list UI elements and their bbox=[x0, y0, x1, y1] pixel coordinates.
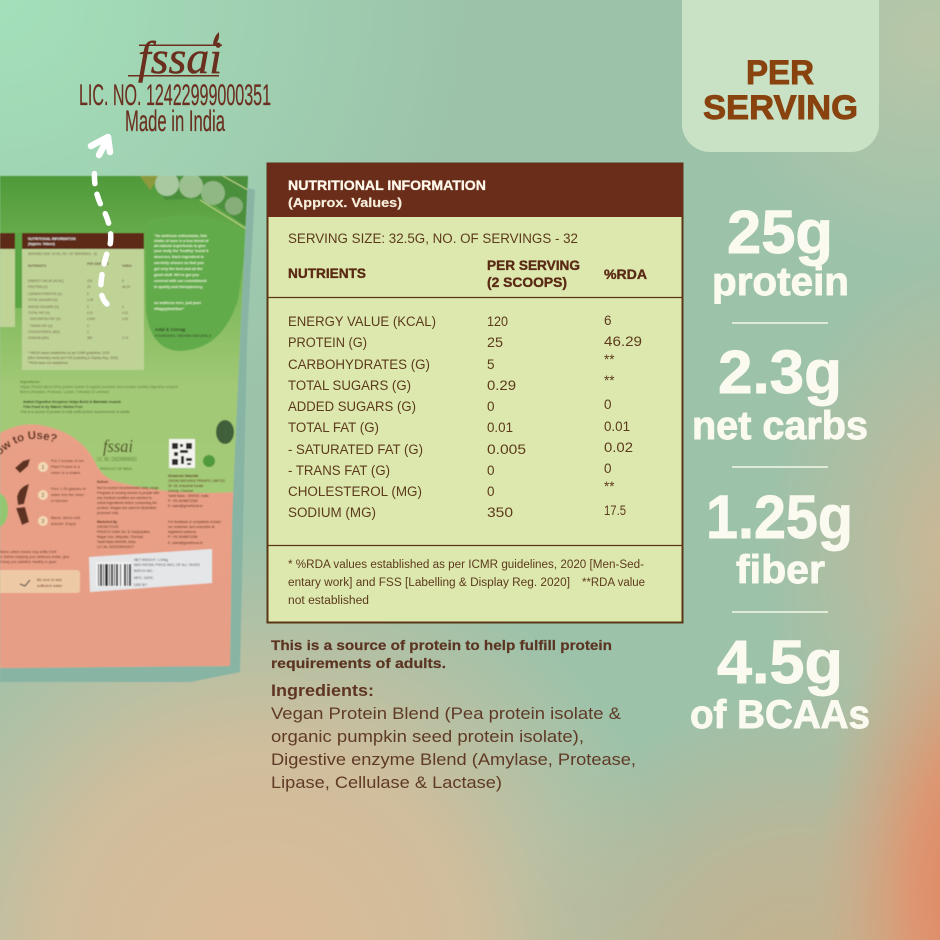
pouch nutrition table: [Men-Sedentary work] and FSS [Labelling & Display Reg. 2020] bbox=[28, 356, 118, 360]
pouch founders note: carefully chosen so that you bbox=[154, 261, 205, 265]
nutrient names: ADDED SUGARS (G) bbox=[288, 399, 416, 414]
table header bbox=[267, 163, 683, 217]
stat: protein: protein bbox=[712, 260, 849, 304]
pouch founders note: get only the best and all the bbox=[154, 267, 203, 271]
rda values: 0 bbox=[604, 461, 612, 476]
fssai licence block: Made in India bbox=[125, 105, 225, 138]
pouch founders note: good stuff. We've got you bbox=[154, 273, 200, 277]
pouch barcode label: USE BY: bbox=[134, 583, 148, 587]
pouch fssai mark: LIC. NO. 12422999000351 bbox=[97, 457, 137, 463]
ingredients: Lipase, Cellulase & Lactase) bbox=[271, 773, 502, 792]
pouch company details: P: +91 8248672289 bbox=[168, 535, 198, 539]
per serving values bbox=[487, 314, 526, 520]
pouch company details: E: sales@growthook.in bbox=[168, 541, 203, 545]
pouch company details: check ingredients before consuming the bbox=[97, 501, 157, 505]
pouch nutrition table: 0 bbox=[87, 324, 89, 328]
pouch founders note: deserves. Each ingredient is bbox=[154, 255, 204, 259]
rda values: 0 bbox=[604, 397, 612, 412]
stat: BCAAs bbox=[690, 628, 870, 737]
pouch how to use: or blender bbox=[51, 499, 69, 503]
pouch founders note: so wellness here, just pure bbox=[154, 301, 201, 305]
pouch company details: Tamil Nadu 600096, India bbox=[97, 540, 136, 544]
pouch fssai mark: PRODUCT OF INDIA bbox=[100, 466, 132, 471]
pouch nutrition table: **RDA value not established bbox=[28, 361, 68, 365]
pouch nutrition table: 0 bbox=[87, 330, 89, 334]
ingredients: organic pumpkin seed protein isolate), bbox=[271, 727, 584, 746]
pouch nutrition table: CARBOHYDRATES (G) bbox=[28, 292, 62, 296]
pouch how to use: d. Before enjoying your delicious shake, give bbox=[0, 555, 69, 559]
rda values: 6 bbox=[604, 313, 612, 328]
product pouch back bbox=[0, 175, 255, 682]
badge heading bbox=[703, 54, 858, 127]
column headings: PER SERVING bbox=[487, 258, 580, 273]
pouch nutrition table: * %RDA values established as per ICMR guidelines, 2020 bbox=[28, 351, 110, 355]
pouch how to use bbox=[0, 430, 86, 594]
rda values: 17.5 bbox=[604, 503, 626, 518]
pouch founders note: your body the 'healthy' boost it bbox=[154, 249, 209, 253]
pouch nutrition table: ADDED SUGARS (G) bbox=[28, 305, 59, 309]
pouch company details: Tamil Nadu - 600032, India bbox=[168, 494, 209, 498]
pouch founders note: covered with our commitment bbox=[154, 279, 207, 283]
pouch company details: Deliver bbox=[97, 480, 109, 484]
per serving values: 120 bbox=[487, 314, 508, 329]
serving size: SERVING SIZE: 32.5G, NO. OF SERVINGS - 32 bbox=[288, 231, 578, 246]
pouch barcode label: MAX RETAIL PRICE INCL OF ALL TAXES bbox=[134, 563, 200, 567]
stat: fiber bbox=[706, 483, 853, 592]
product pouch back: FOUNDERS, GROWN NATURALS bbox=[155, 334, 212, 338]
pouch company details: Guindy, Chennai bbox=[168, 489, 193, 493]
per serving values: 0.29 bbox=[487, 378, 516, 393]
nutrient names: TOTAL SUGARS (G) bbox=[288, 378, 411, 393]
dashed arrow bbox=[91, 137, 111, 304]
ingredients bbox=[271, 681, 636, 792]
pouch nutrition table: 6 bbox=[122, 279, 124, 283]
pouch how to use: blend, which means may settle if left bbox=[0, 550, 56, 554]
footnote bbox=[288, 559, 645, 607]
pouch nutrition table: PROTEIN (G) bbox=[28, 285, 48, 289]
pouch how to use: ll keep you satisfied, healthy or goes bbox=[0, 560, 57, 564]
nutrient names: TOTAL FAT (G) bbox=[288, 420, 379, 435]
nutrient names: - TRANS FAT (G) bbox=[288, 463, 390, 478]
pouch fssai mark bbox=[97, 436, 137, 471]
per serving values: 0.005 bbox=[487, 442, 526, 457]
fssai licence block bbox=[79, 32, 271, 138]
column headings: (2 SCOOPS) bbox=[487, 275, 567, 290]
pouch how to use: mixer or a shaker bbox=[51, 471, 81, 475]
pouch nutrition table: %RDA bbox=[122, 264, 132, 268]
pouch company details: product. Images are used for illustrative bbox=[97, 506, 156, 510]
pouch ingredients: Blend (Amylase, Protease, Lipase, Cellulase & Lactase) bbox=[20, 390, 109, 394]
pouch nutrition table: PER SERVING bbox=[87, 262, 109, 266]
nutrient names: - SATURATED FAT (G) bbox=[288, 442, 423, 457]
pouch how to use: Put 2 scoops of our bbox=[51, 459, 84, 463]
pouch ingredients bbox=[20, 380, 178, 414]
fssai licence block: fssai bbox=[138, 32, 222, 83]
pouch founders note bbox=[154, 234, 209, 311]
pouch barcode label: NET WEIGHT: 1.04kg bbox=[134, 558, 168, 562]
per serving values: 0.01 bbox=[487, 420, 513, 435]
pouch barcode label: MFG. DATE: bbox=[134, 576, 154, 580]
pouch company details: registered address bbox=[168, 530, 196, 534]
pouch nutrition table: 5 bbox=[87, 292, 89, 296]
pouch company details: E: sales@growthook.in bbox=[168, 504, 203, 508]
stat: net carbs: net carbs bbox=[692, 404, 868, 448]
pouch how to use: smooth. Enjoy! bbox=[51, 522, 76, 526]
pouch nutrition table: 46.29 bbox=[122, 285, 130, 289]
pouch fssai mark: fssai bbox=[103, 436, 133, 456]
pouch nutrition table: 17.5 bbox=[122, 336, 128, 340]
pouch nutrition table: 25 bbox=[87, 285, 91, 289]
stat: net carbs bbox=[692, 338, 868, 448]
rda values bbox=[604, 313, 642, 518]
rda values: ** bbox=[604, 479, 615, 494]
pouch company details: GROW FOOD bbox=[97, 525, 119, 529]
stat: BCAAs: 4.5g bbox=[717, 628, 843, 696]
per serving values: 0 bbox=[487, 399, 495, 414]
ingredients: Digestive enzyme Blend (Amylase, Protease, bbox=[271, 750, 636, 769]
nutrient names: CARBOHYDRATES (G) bbox=[288, 357, 430, 372]
pouch nutrition table: - SATURATED FAT (G) bbox=[28, 317, 61, 321]
pouch nutrition table: 0.02 bbox=[122, 317, 128, 321]
badge heading: SERVING bbox=[703, 89, 858, 127]
pouch nutrition table: SODIUM (MG) bbox=[28, 336, 49, 340]
ingredients: Vegan Protein Blend (Pea protein isolate & bbox=[271, 704, 622, 723]
pouch how to use: Pour 1.25 glasses of bbox=[51, 487, 87, 491]
ingredients: Ingredients: bbox=[271, 681, 374, 700]
rda values: ** bbox=[604, 373, 615, 388]
pouch company details: PRESTO GSM, No. 8, Kanjurpatha bbox=[97, 530, 150, 534]
pouch nutrition table: 120 bbox=[87, 279, 93, 283]
pouch company details: Nagar Line, Melpalai, Chennai, bbox=[97, 535, 144, 539]
pouch nutrition table: ENERGY VALUE (KCAL) bbox=[28, 279, 64, 283]
pouch founders note: all-natural superfoods to give bbox=[154, 244, 206, 248]
pouch company details: P: +91 8248672289 bbox=[168, 499, 198, 503]
pouch how to use: 2 bbox=[42, 493, 44, 499]
pouch nutrition table: 0.29 bbox=[87, 298, 93, 302]
pouch nutrition table: (Approx. Values) bbox=[28, 242, 55, 246]
fssai licence block: LIC. NO. 12422999000351 bbox=[79, 79, 271, 112]
pouch nutrition table: 0 bbox=[122, 305, 124, 309]
rda values: 0.02 bbox=[604, 440, 633, 455]
product pouch back: Adal & Corrag bbox=[155, 327, 186, 332]
rda values: 46.29 bbox=[604, 334, 642, 349]
pouch company details: our customer care executive at bbox=[168, 525, 214, 529]
nutrient names: ENERGY VALUE (KCAL) bbox=[288, 314, 436, 329]
stat: fiber: 1.25g bbox=[706, 483, 853, 551]
rda values: ** bbox=[604, 352, 615, 367]
pouch how to use: sufficient water bbox=[37, 584, 63, 588]
pouch company details bbox=[97, 474, 226, 549]
footnote: * %RDA values established as per ICMR guidelines, 2020 [Men-Sed- bbox=[288, 559, 644, 571]
pouch nutrition table: 0.005 bbox=[87, 317, 95, 321]
per serving badge bbox=[682, 0, 879, 152]
pouch ingredients: Vegan Protein Blend (Pea protein isolate & organic pumpkin seed protein isolate) Digestive enzyme bbox=[20, 385, 178, 389]
stat: protein: 25g bbox=[727, 198, 833, 266]
table header: (Approx. Values) bbox=[288, 195, 402, 210]
pouch how to use: 3 bbox=[42, 519, 44, 525]
pouch how to use: Blend, blend until bbox=[51, 516, 80, 520]
pouch nutrition table: - TRANS FAT (G) bbox=[28, 324, 53, 328]
leaf shape bbox=[146, 240, 245, 352]
pouch QR code bbox=[169, 439, 215, 468]
per serving values: 0 bbox=[487, 484, 495, 499]
pouch company details: any medical condition are advised to bbox=[97, 496, 152, 500]
source of protein statement: requirements of adults. bbox=[271, 655, 446, 671]
pouch nutrition table: TOTAL FAT (G) bbox=[28, 311, 50, 315]
pouch company details: SF-18, Industrial Estate bbox=[168, 484, 204, 488]
column headings: NUTRIENTS bbox=[288, 266, 366, 281]
pouch salmon lower area bbox=[0, 424, 240, 670]
pouch ingredients: Ingredients: bbox=[20, 380, 41, 384]
pouch ingredients: This Food is by Nature Gluten Free bbox=[23, 405, 83, 409]
pouch founders note: shake of ours is a true blend of bbox=[154, 239, 209, 243]
pouch nutrition table: NUTRITIONAL INFORMATION bbox=[28, 237, 76, 241]
pouch founders note: to quality and transparency, bbox=[154, 285, 203, 289]
pouch company details: GROW NATURES PRIVATE LIMITED bbox=[168, 479, 226, 483]
nutrient names: CHOLESTEROL (MG) bbox=[288, 484, 422, 499]
pouch nutrition table: 0.01 bbox=[87, 311, 93, 315]
badge heading: PER bbox=[746, 54, 814, 92]
footnote: **RDA value bbox=[582, 577, 645, 589]
source of protein statement bbox=[271, 637, 612, 671]
pouch ingredients: Added Digestive Enzymes Helps Build & Maintain muscle bbox=[23, 400, 121, 404]
nutrient names: PROTEIN (G) bbox=[288, 335, 367, 350]
source of protein statement: This is a source of protein to help fulfill protein bbox=[271, 637, 612, 653]
footnote: entary work] and FSS [Labelling & Display Reg. 2020] bbox=[288, 577, 570, 589]
nutrient names: SODIUM (MG) bbox=[288, 505, 376, 520]
pouch barcode label: BATCH NO.: bbox=[134, 569, 154, 573]
pouch company details: Grownuts Naturals bbox=[168, 474, 198, 478]
pouch nutrition table: 0.01 bbox=[122, 311, 128, 315]
column headings: %RDA bbox=[604, 267, 647, 282]
pouch company details: Not to exceed recommended daily usage. bbox=[97, 486, 160, 490]
stat: fiber: fiber bbox=[736, 548, 825, 592]
pouch how to use: water into the mixer bbox=[51, 493, 85, 497]
per serving values: 5 bbox=[487, 357, 495, 372]
pouch founders note: #HappyNutrition" bbox=[154, 307, 185, 311]
rda values: 0.01 bbox=[604, 419, 630, 434]
pouch how to use: 1 bbox=[42, 465, 44, 471]
pouch company details: For feedback or complaints contact bbox=[168, 520, 221, 524]
pouch nutrition table: 0 bbox=[87, 305, 89, 309]
peas bbox=[140, 172, 248, 230]
pouch nutrition table: TOTAL SUGARS (G) bbox=[28, 298, 58, 302]
stat: BCAAs: of BCAAs bbox=[690, 693, 870, 737]
pouch how to use: Be sure to add bbox=[37, 578, 62, 582]
pouch barcode label bbox=[89, 549, 212, 592]
pouch ingredients: This is a source of protein to help fulfill protein requirements of adults bbox=[20, 410, 130, 414]
pouch nutrition table: NUTRIENTS bbox=[28, 264, 46, 268]
stat: protein bbox=[712, 198, 849, 304]
pouch how to use: Plant Protein in a bbox=[51, 465, 81, 469]
pouch company details: Pregnant & nursing women & people with bbox=[97, 491, 159, 495]
pouch nutrition table bbox=[0, 233, 144, 370]
pouch nutrition table: CHOLESTEROL (MG) bbox=[28, 330, 60, 334]
stat: net carbs: 2.3g bbox=[718, 338, 842, 406]
pouch company details: Marketed By bbox=[97, 520, 117, 524]
per serving values: 0 bbox=[487, 463, 495, 478]
pouch nutrition table: 350 bbox=[87, 336, 93, 340]
per serving values: 350 bbox=[487, 505, 513, 520]
pouch company details: purposes only. bbox=[97, 511, 119, 515]
pouch nutrition table: SERVING SIZE: 32.5G, NO. OF SERVINGS - 32 bbox=[28, 252, 97, 256]
footnote: not established bbox=[288, 595, 369, 607]
pouch founders note: "As wellness enthusiasts, this bbox=[154, 234, 207, 238]
nutrition table panel bbox=[267, 163, 683, 622]
per serving values: 25 bbox=[487, 335, 503, 350]
pouch company details: LIC No. 8222039010027 bbox=[97, 545, 134, 549]
nutrient names bbox=[288, 314, 436, 520]
table header: NUTRITIONAL INFORMATION bbox=[288, 178, 486, 193]
column headings bbox=[288, 258, 647, 290]
